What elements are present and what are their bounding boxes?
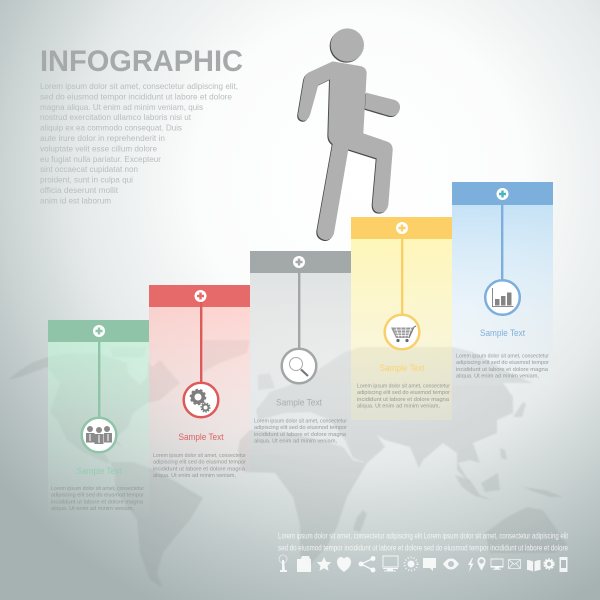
intro text block: officia deserunt mollit [40, 185, 119, 195]
icon: phone [560, 557, 568, 572]
blue plus button [496, 188, 508, 200]
icon: monitor [383, 556, 398, 572]
intro text block: Lorem ipsum dolor sit amet, consectetur adipiscing elit, [40, 81, 238, 91]
icon: heart [337, 557, 351, 572]
green description: Lorem ipsum dolor sit amet, consectetur [51, 486, 144, 492]
blue stem [501, 198, 503, 282]
panel: red step [149, 285, 250, 490]
icon: book [527, 560, 540, 572]
icon: eye [443, 558, 459, 570]
green description: adipiscing elit sed do eiusmod tempor [51, 493, 144, 499]
panel: green step [48, 320, 149, 520]
intro text block: voluptate velit esse cillum dolore [40, 143, 157, 153]
red label: Sample Text [178, 432, 224, 443]
icon: folder [297, 556, 311, 572]
icon: sun [404, 558, 418, 570]
gray description: Lorem ipsum dolor sit amet, consectetur [254, 418, 347, 424]
red description: aliqua. Ut enim ad minim veniam, [153, 473, 236, 479]
icon: gears [184, 383, 218, 417]
yellow description: adipiscing elit sed do eiusmod tempor [357, 390, 450, 396]
red description: incididunt ut labore et dolore magna [153, 466, 246, 472]
icon: envelope [508, 560, 520, 568]
green description: incididunt ut labore et dolore magna [51, 499, 144, 505]
icon: share [358, 556, 376, 572]
intro text block: aute irure dolor in reprehenderit in [40, 133, 165, 143]
gray description: incididunt ut labore et dolore magna [254, 432, 347, 438]
intro text block: magna aliqua. Ut enim ad minim veniam, quis [40, 102, 203, 112]
green stem [98, 336, 100, 420]
red stem [200, 300, 202, 384]
world map [8, 340, 567, 588]
yellow description: Lorem ipsum dolor sit amet, consectetur [357, 384, 450, 390]
panel: blue step [452, 182, 553, 385]
intro text block: sed do eiusmod tempor incididunt ut labore et dolore [40, 91, 232, 101]
figure: stepping person [297, 28, 400, 241]
intro text block: aliquip ex ea commodo consequat. Duis [40, 123, 182, 133]
gray stem [298, 266, 300, 350]
green header [48, 320, 149, 342]
gray header [250, 251, 351, 273]
blue label: Sample Text [480, 328, 525, 339]
intro text block: anim id est laborum [40, 195, 111, 205]
green label: Sample Text [76, 466, 122, 477]
red description: adipiscing elit sed do eiusmod tempor [153, 460, 246, 466]
gray plus button [293, 256, 305, 268]
panel: yellow step [351, 217, 452, 420]
green description: aliqua. Ut enim ad minim veniam, [51, 506, 134, 512]
yellow label: Sample Text [380, 363, 425, 374]
blue header [452, 182, 553, 205]
icon: bar chart [485, 280, 520, 315]
intro text block: eu fugiat nulla pariatur. Excepteur [40, 154, 161, 164]
yellow description: aliqua. Ut enim ad minim veniam, [357, 404, 440, 410]
gray description: adipiscing elit sed do eiusmod tempor [254, 425, 347, 431]
red header [149, 285, 250, 307]
icon: magnifier [282, 349, 316, 383]
intro text block: proident, sunt in culpa qui [40, 175, 133, 185]
icon: star [317, 557, 331, 571]
icon: bolt [468, 558, 474, 572]
footer text [278, 532, 569, 552]
gray description [254, 418, 347, 444]
icon: antenna [279, 555, 287, 572]
blue description: aliqua. Ut enim ad minim veniam, [456, 374, 539, 380]
intro text block: sint occaecat cupidatat non [40, 164, 138, 174]
intro text block: nostrud exercitation ullamco laboris nisi ut [40, 112, 192, 122]
blue description [456, 354, 549, 380]
icon: cart [385, 315, 419, 349]
title: INFOGRAPHIC [40, 45, 243, 78]
green plus button [93, 325, 105, 337]
yellow description [357, 384, 450, 410]
red plus button [194, 290, 206, 302]
red description [153, 453, 246, 479]
yellow stem [401, 232, 403, 316]
red description: Lorem ipsum dolor sit amet, consectetur [153, 453, 246, 459]
gray description: aliqua. Ut enim ad minim veniam, [254, 438, 337, 444]
icon: gear [544, 559, 554, 569]
yellow description: incididunt ut labore et dolore magna [357, 397, 450, 403]
intro text block [40, 81, 238, 205]
blue description: incididunt ut labore et dolore magna [456, 367, 549, 373]
green description [51, 486, 144, 512]
blue description: Lorem ipsum dolor sit amet, consectetur [456, 354, 549, 360]
panel: gray step [250, 251, 351, 455]
icon: people [82, 418, 116, 452]
icon: speech bubble [423, 558, 436, 571]
icon row [279, 555, 568, 572]
gray label: Sample Text [276, 398, 322, 408]
icon: small monitor [491, 559, 503, 570]
yellow header [351, 217, 452, 239]
blue description: adipiscing elit sed do eiusmod tempor [456, 360, 549, 366]
icon: pin [477, 557, 486, 570]
yellow plus button [396, 222, 408, 234]
